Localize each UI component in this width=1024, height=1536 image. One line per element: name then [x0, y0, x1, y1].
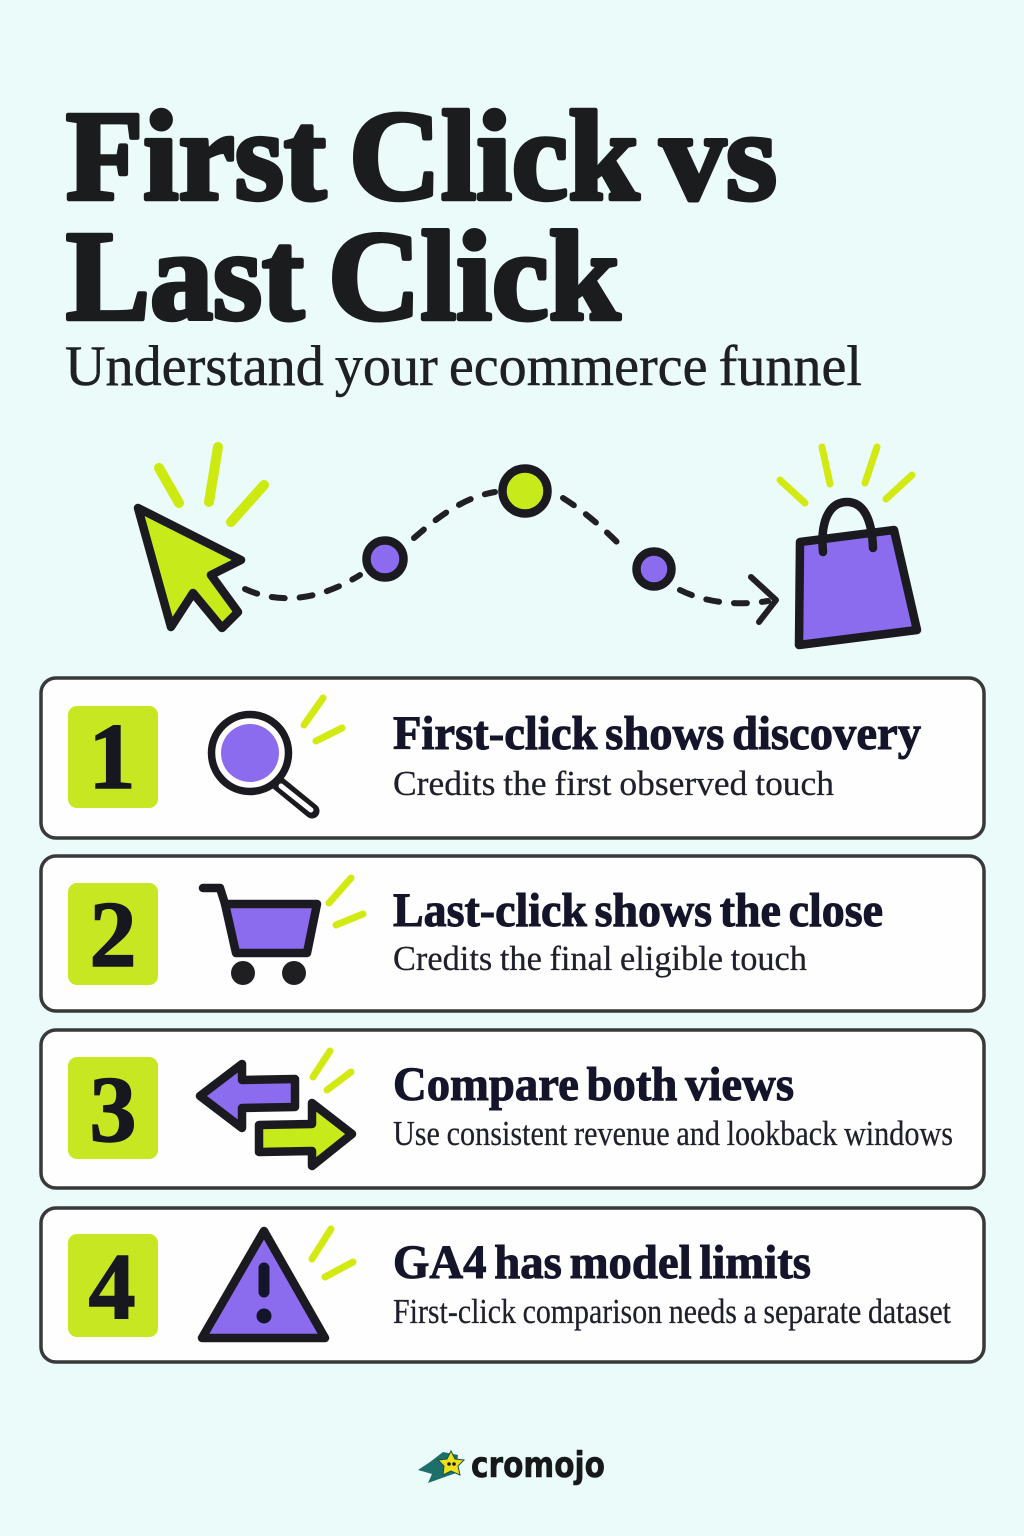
heading: GA4 has model limits: [393, 1236, 811, 1289]
number badge 2: 2: [90, 883, 136, 987]
node: middle touch: [502, 468, 548, 514]
icon: warning triangle: [202, 1229, 353, 1338]
node: later touch: [636, 552, 672, 586]
number badge 1: 1: [88, 705, 136, 809]
number badge 3: 3: [90, 1058, 136, 1162]
number badge 4: [68, 1234, 158, 1339]
number badge 1: [68, 705, 158, 809]
icon: swap arrows: [200, 1051, 352, 1166]
description: Credits the first observed touch: [393, 764, 834, 803]
journey illustration: [138, 447, 917, 645]
icon: cursor: [138, 447, 264, 628]
heading: First-click shows discovery: [393, 707, 921, 760]
title: Click: [328, 205, 620, 347]
icon: magnifier: [212, 698, 342, 811]
title: vs: [660, 85, 777, 227]
wordmark: cromojo: [471, 1445, 605, 1486]
panel: last-click: [41, 856, 984, 1011]
title: Click: [349, 85, 639, 227]
number badge 4: 4: [88, 1235, 136, 1339]
title: First: [66, 85, 326, 227]
panel: compare: [41, 1030, 984, 1188]
subtitle: Understand your ecommerce funnel: [65, 335, 862, 398]
number badge 2: [68, 883, 158, 987]
icon: shopping bag: [780, 447, 917, 645]
description: Use consistent revenue and lookback windows: [393, 1114, 953, 1153]
logo: cromojo: [418, 1445, 605, 1486]
node: first touch: [366, 540, 404, 578]
title: [66, 85, 777, 347]
icon: shooting star: [418, 1451, 464, 1483]
heading: Compare both views: [393, 1058, 794, 1111]
heading: Last-click shows the close: [393, 884, 883, 937]
dashed path with arrow: [245, 492, 776, 622]
panel: GA4 limits: [41, 1208, 984, 1362]
panel: first-click: [41, 678, 984, 838]
description: Credits the final eligible touch: [393, 939, 807, 978]
icon: cart: [203, 878, 363, 985]
number badge 3: [68, 1057, 158, 1162]
title: Last: [66, 205, 304, 347]
